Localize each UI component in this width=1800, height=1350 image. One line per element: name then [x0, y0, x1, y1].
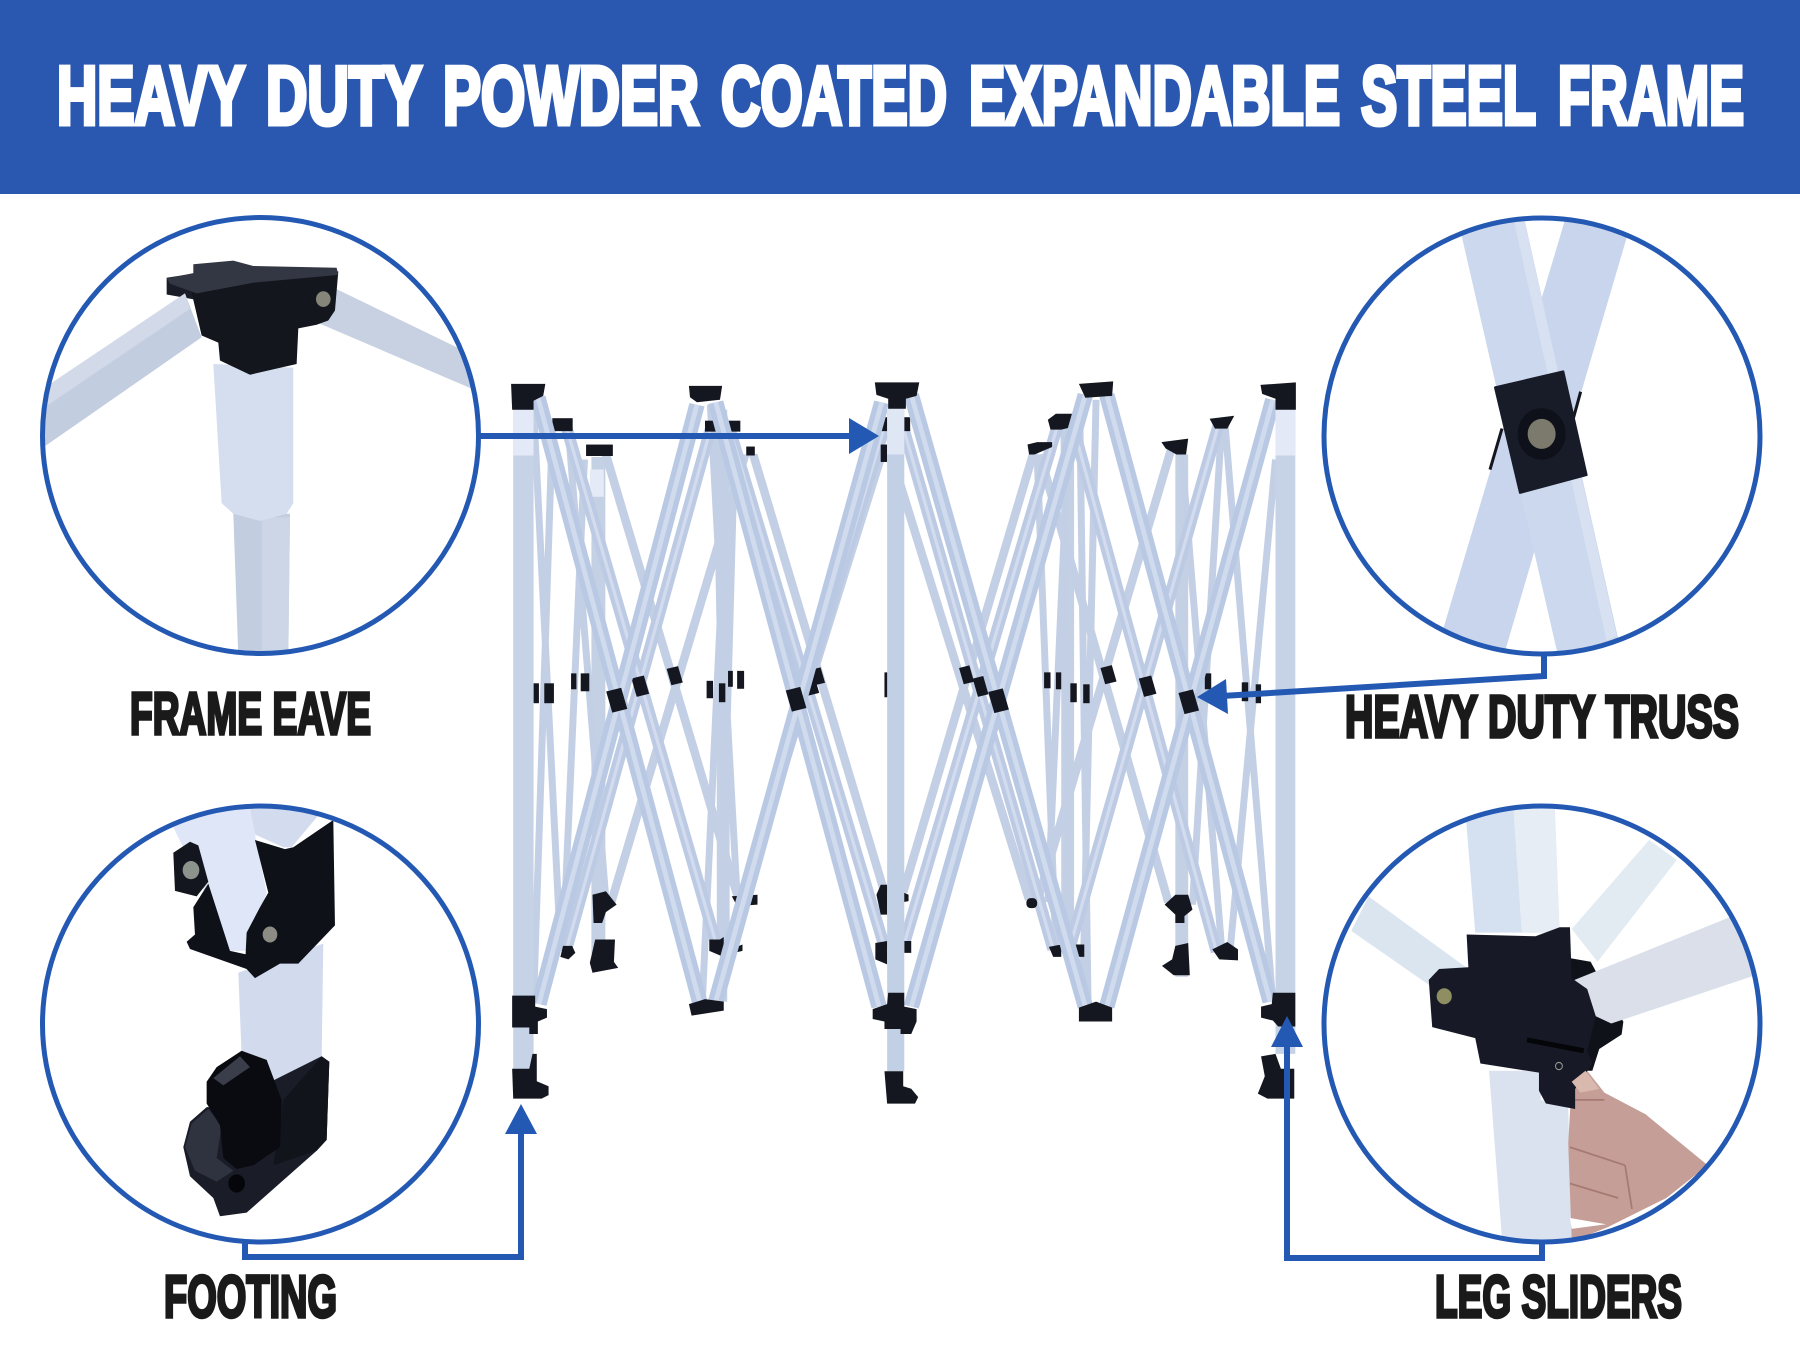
- black slider: [1429, 927, 1596, 1109]
- tube highlight: [1513, 216, 1617, 641]
- pivot plate: [1495, 371, 1587, 493]
- front truss bars: [538, 395, 1273, 1007]
- rear tube: [1443, 214, 1628, 657]
- angled tube: [173, 802, 267, 951]
- side truss bars: [534, 400, 1276, 1002]
- title: EXPANDABLE: [969, 49, 1340, 142]
- ring: [42, 218, 478, 654]
- upper post: [1465, 802, 1560, 933]
- label: footing: FOOTING: [164, 1264, 337, 1330]
- rear truss bars: [606, 450, 1171, 902]
- black eave bracket: [190, 271, 338, 375]
- bracket top: [167, 261, 338, 293]
- front black parts: [511, 381, 1296, 1104]
- title: DUTY: [266, 49, 422, 142]
- arrow: leg sliders to frame slider: [1271, 1016, 1542, 1258]
- rear bracket: [1570, 958, 1623, 1071]
- foot plate: [183, 1056, 329, 1216]
- label: frame eave: FRAME EAVE: [130, 681, 371, 747]
- panel: frame eave: [40, 218, 479, 656]
- bracket rear wing: [166, 274, 194, 300]
- lower post: [233, 514, 290, 656]
- rear pivots: [631, 665, 1156, 697]
- rear tube: [250, 808, 318, 848]
- arrow: footing to frame foot: [245, 1104, 537, 1257]
- panel: footing: [42, 802, 478, 1242]
- rear black parts: [534, 414, 1261, 975]
- small screw: [1555, 1062, 1562, 1070]
- title: HEAVY: [57, 49, 245, 142]
- foot sleeve: [273, 1056, 329, 1165]
- title: POWDER: [443, 49, 699, 142]
- ring: [1324, 218, 1760, 654]
- knob gloss: [213, 1056, 250, 1085]
- foot pad sheen: [185, 1109, 233, 1182]
- header banner: [0, 0, 1800, 194]
- left bracket: [173, 842, 208, 896]
- hand gap: [1570, 1218, 1606, 1229]
- lower bracket: [187, 884, 247, 969]
- middle truss bars: [566, 422, 1219, 952]
- arrow: truss to frame pivot: [1197, 654, 1544, 714]
- tabs: [1490, 392, 1581, 470]
- thumb tip: [1572, 1071, 1599, 1093]
- right arm: [1570, 916, 1763, 1024]
- back posts: [590, 425, 1188, 977]
- lower post: [1489, 1071, 1572, 1249]
- right arm: [318, 289, 477, 391]
- front pivots: [606, 687, 1199, 714]
- right bracket: [245, 820, 335, 978]
- slider lip: [1527, 1040, 1584, 1051]
- ring: [42, 806, 478, 1242]
- ring: [1324, 806, 1760, 1242]
- screw: [316, 291, 331, 307]
- hand creases: [1570, 1100, 1632, 1209]
- left arm: [40, 293, 202, 450]
- sleeve: [213, 364, 293, 521]
- rear right arm: [1572, 840, 1677, 962]
- screw: [1437, 988, 1452, 1004]
- left arm: [1351, 896, 1468, 987]
- screw: [1518, 408, 1566, 460]
- arrow: frame eave to frame: [479, 418, 879, 454]
- screws: [183, 861, 199, 879]
- panel: heavy duty truss: [1324, 214, 1760, 657]
- front tube: [1460, 214, 1618, 657]
- title: [57, 49, 1744, 142]
- post: [238, 944, 324, 1080]
- expanded steel frame illustration: [511, 381, 1296, 1104]
- front posts: [513, 405, 1295, 1071]
- title: COATED: [721, 49, 947, 142]
- title: STEEL: [1361, 49, 1536, 142]
- foot hole: [228, 1174, 245, 1193]
- knob: [207, 1051, 282, 1169]
- hand: [1568, 1071, 1708, 1242]
- panel: leg sliders: [1324, 802, 1763, 1249]
